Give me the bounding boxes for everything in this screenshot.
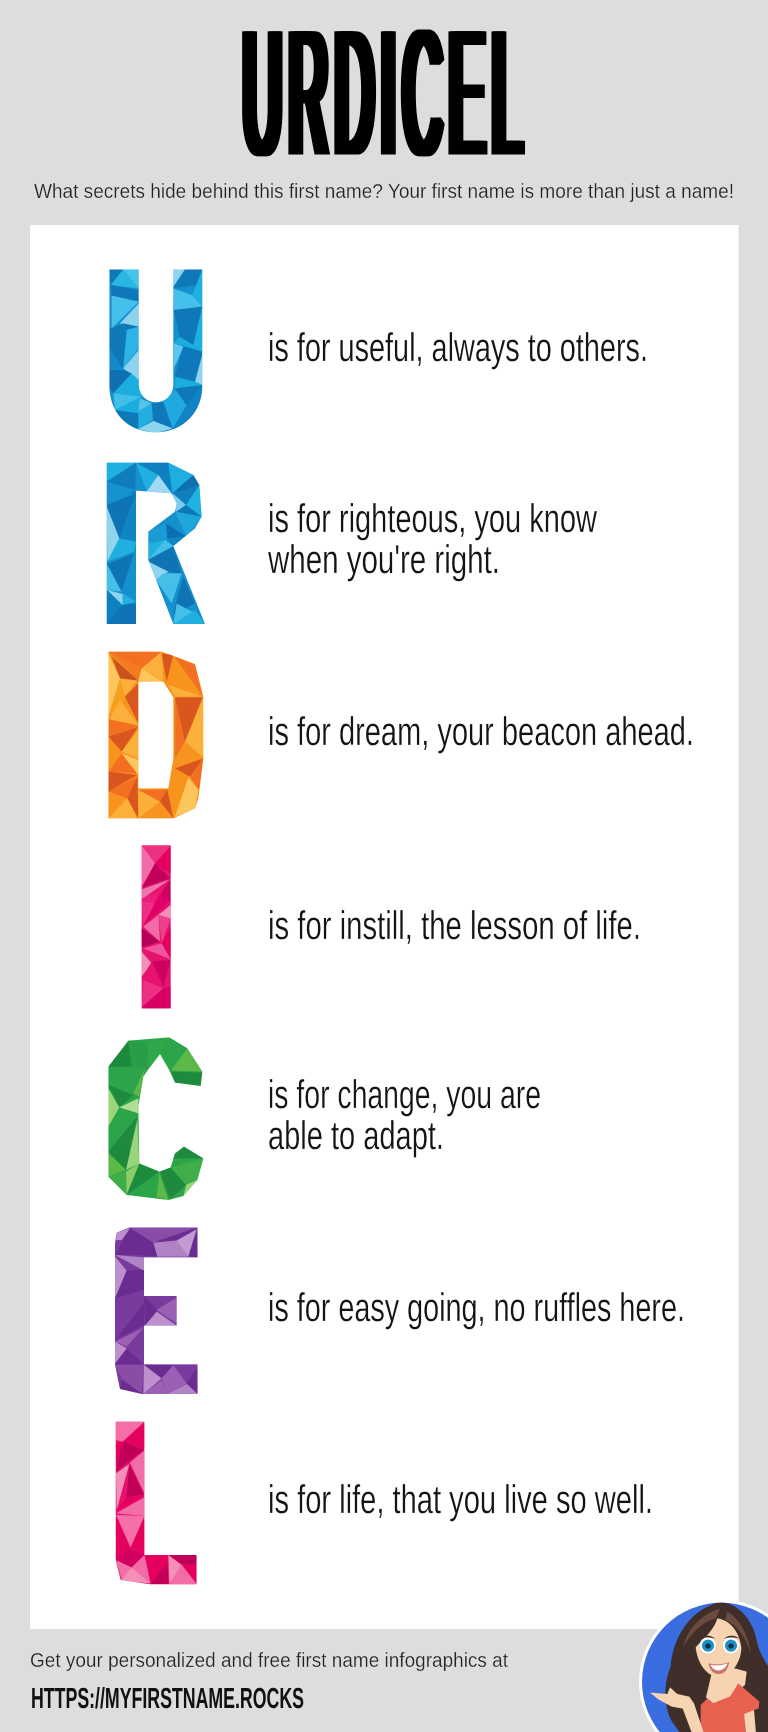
footer: website link: HTTPS://MYFIRSTNAME.ROCKS — [31, 1683, 304, 1715]
row: letter R — [105, 460, 597, 625]
row: letter D — [107, 650, 694, 820]
row: letter E — [113, 1226, 685, 1395]
text: meaning of R: is for righteous, you know — [268, 497, 597, 541]
row: letter R: when you're right. — [267, 538, 500, 582]
row: letter U — [107, 268, 648, 433]
subtitle: What secrets hide behind this first name? Your first name is more than just a name! — [34, 181, 734, 203]
row: letter C — [107, 1035, 541, 1202]
icon: low-poly letter L — [113, 1420, 198, 1586]
text: meaning of C: is for change, you are — [268, 1073, 541, 1117]
icon: low-poly letter U — [107, 268, 205, 433]
icon: low-poly letter C — [107, 1035, 205, 1202]
row: letter I — [142, 845, 641, 1008]
text: meaning of I: is for instill, the lesson of life. — [268, 904, 641, 948]
icon: low-poly letter I — [142, 845, 171, 1008]
row: letter C: able to adapt. — [268, 1114, 444, 1158]
row: letter L — [113, 1420, 653, 1586]
icon: low-poly letter R — [105, 460, 207, 625]
icon: low-poly letter E — [113, 1226, 199, 1395]
panel: white letter panel — [30, 225, 738, 1629]
icon: avatar of woman in circle — [639, 1600, 768, 1732]
icon: low-poly letter D — [107, 650, 205, 820]
footer: invitation text: Get your personalized and free first name infographics at — [30, 1650, 508, 1672]
